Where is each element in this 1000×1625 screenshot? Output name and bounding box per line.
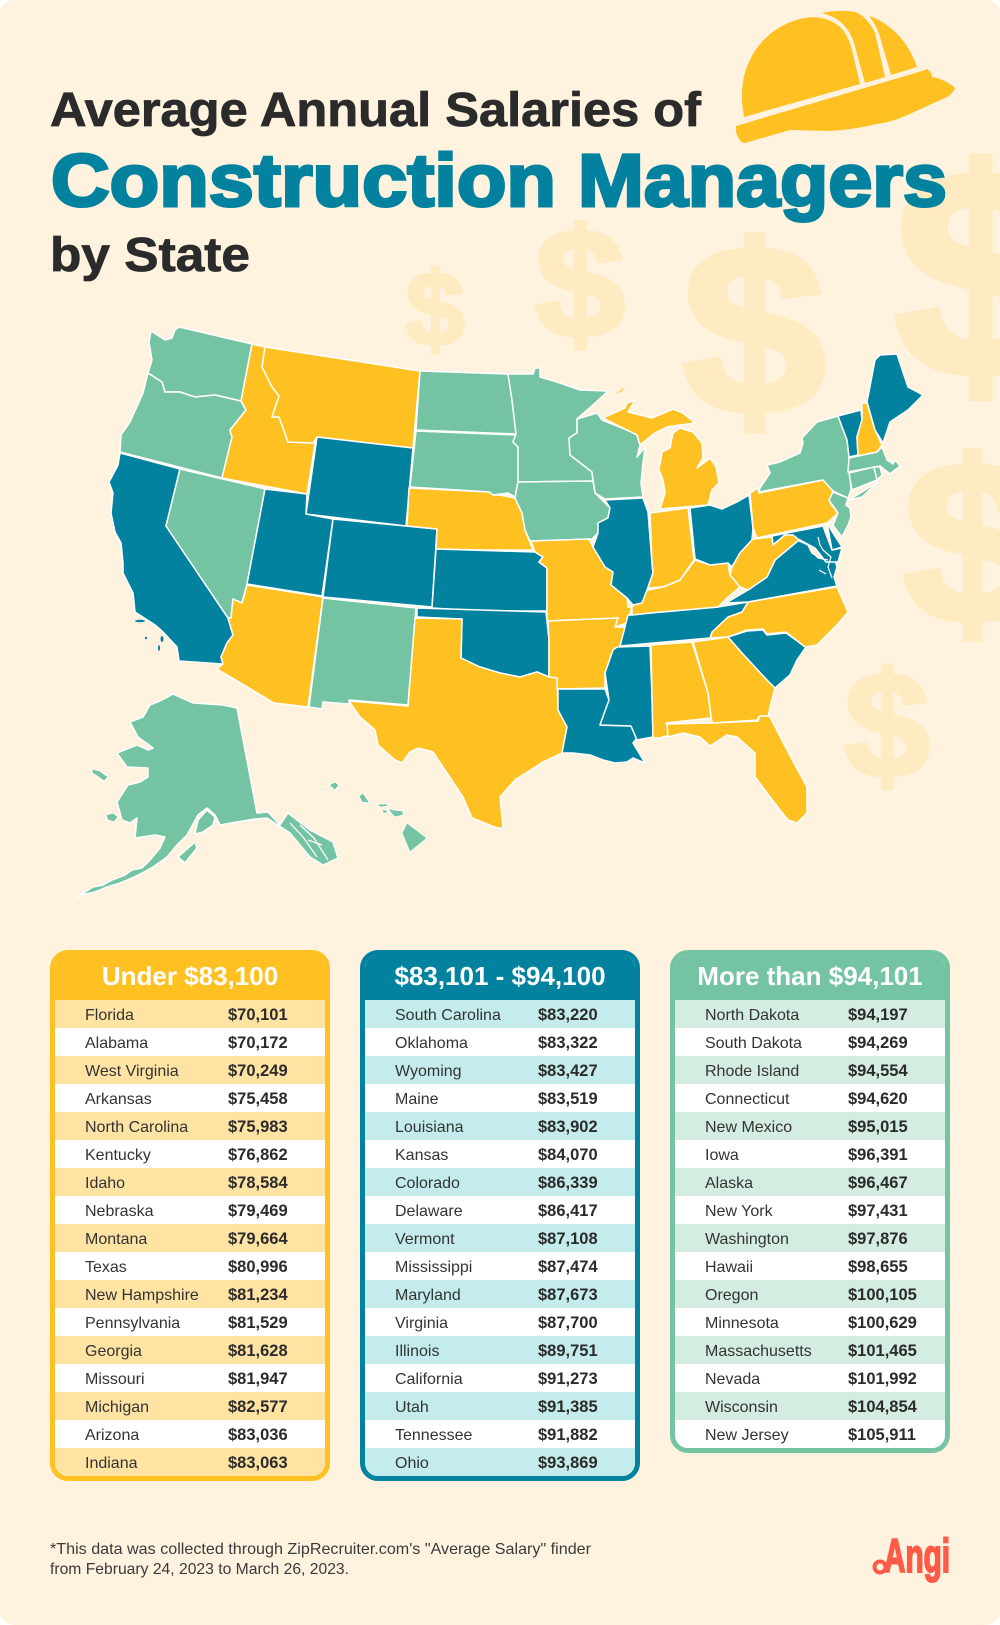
- state salary rows: $105,911: [848, 1426, 916, 1444]
- state salary rows: Ohio: [395, 1455, 429, 1472]
- panel: Under $83,100: [50, 950, 330, 1481]
- state salary rows: $97,876: [848, 1230, 908, 1248]
- panel heading: Under $83,100: [102, 961, 278, 991]
- state: Washington: [148, 327, 252, 401]
- state salary rows: New York: [705, 1203, 773, 1220]
- state: Idaho: [222, 344, 316, 494]
- state salary rows: Nebraska: [85, 1203, 153, 1220]
- Angi logo: Angi: [884, 1529, 950, 1582]
- state salary rows: Alaska: [705, 1175, 753, 1192]
- state salary rows: $98,655: [848, 1258, 908, 1276]
- state: North Dakota: [416, 371, 516, 434]
- state: Texas: [349, 618, 567, 828]
- state salary rows: Massachusetts: [705, 1343, 812, 1360]
- state salary rows: West Virginia: [85, 1063, 179, 1080]
- state: Rhode Island: [874, 467, 882, 480]
- background dollar signs: $: [405, 251, 465, 368]
- state: Montana: [262, 347, 420, 448]
- state: Pennsylvania: [750, 480, 838, 538]
- state salary rows: $87,108: [538, 1230, 598, 1248]
- state salary rows: [365, 1000, 635, 1476]
- state salary rows: $83,322: [538, 1034, 598, 1052]
- state: Tennessee: [620, 602, 748, 646]
- state salary rows: $70,101: [228, 1006, 288, 1024]
- state salary rows: Washington: [705, 1231, 789, 1248]
- state salary rows: Pennsylvania: [85, 1315, 180, 1332]
- state: Wisconsin: [569, 413, 645, 499]
- state salary rows: North Dakota: [705, 1007, 799, 1024]
- state salary rows: $83,220: [538, 1006, 598, 1024]
- state salary rows: $104,854: [848, 1398, 917, 1416]
- background dollar signs: [405, 110, 1000, 810]
- panel: More than $94,101: [670, 950, 950, 1453]
- state salary rows: $96,467: [848, 1174, 908, 1192]
- state salary rows: Minnesota: [705, 1315, 779, 1332]
- state salary rows: Missouri: [85, 1371, 145, 1388]
- state salary rows: $87,474: [538, 1258, 598, 1276]
- state salary rows: South Dakota: [705, 1035, 802, 1052]
- state: Connecticut: [849, 467, 877, 490]
- background dollar signs: $: [844, 642, 930, 810]
- state salary rows: Rhode Island: [705, 1063, 799, 1080]
- state: California: [109, 453, 233, 664]
- state: Nebraska: [407, 488, 533, 550]
- state salary rows: [55, 1000, 325, 1476]
- state salary rows: Florida: [85, 1007, 134, 1024]
- state: West Virginia: [730, 535, 799, 590]
- state: Maine: [867, 354, 923, 443]
- state salary rows: South Carolina: [395, 1007, 501, 1024]
- state salary rows: $94,554: [848, 1062, 908, 1080]
- state salary rows: $81,234: [228, 1286, 288, 1304]
- state salary rows: Tennessee: [395, 1427, 472, 1444]
- panel heading: [365, 955, 635, 1000]
- state salary rows: $89,751: [538, 1342, 598, 1360]
- state salary rows: $100,629: [848, 1314, 917, 1332]
- state: Kansas: [432, 549, 547, 611]
- state: Iowa: [515, 481, 610, 541]
- panel heading: [675, 955, 945, 1000]
- state salary rows: $94,269: [848, 1034, 908, 1052]
- state salary rows: $97,431: [848, 1202, 908, 1220]
- state salary rows: $91,385: [538, 1398, 598, 1416]
- state: Oregon: [120, 373, 246, 478]
- state: Ohio: [690, 495, 753, 567]
- state: New Hampshire: [857, 403, 882, 456]
- state: Delaware: [827, 523, 842, 550]
- state salary rows: $76,862: [228, 1146, 288, 1164]
- state salary rows: North Carolina: [85, 1119, 188, 1136]
- state salary rows: Delaware: [395, 1203, 463, 1220]
- title line 3: by State: [50, 229, 250, 282]
- title line 1: Average Annual Salaries of: [50, 84, 702, 137]
- title line 2: Managers: [578, 139, 947, 222]
- state salary rows: Montana: [85, 1231, 147, 1248]
- state: Illinois: [593, 498, 653, 605]
- state salary rows: $81,947: [228, 1370, 288, 1388]
- state: Colorado: [323, 519, 437, 607]
- state salary rows: $83,427: [538, 1062, 598, 1080]
- state salary rows: $70,249: [228, 1062, 288, 1080]
- state salary rows: Arkansas: [85, 1091, 152, 1108]
- title: [50, 84, 947, 282]
- state salary rows: $78,584: [228, 1174, 288, 1192]
- state salary rows: $79,469: [228, 1202, 288, 1220]
- state: Oklahoma: [417, 608, 549, 677]
- state salary rows: Michigan: [85, 1399, 149, 1416]
- state salary rows: New Jersey: [705, 1427, 789, 1444]
- state salary rows: Illinois: [395, 1343, 439, 1360]
- panel heading: [55, 955, 325, 1000]
- state: Hawaii: [321, 782, 427, 852]
- state salary rows: $84,070: [538, 1146, 598, 1164]
- state: Arizona: [217, 585, 323, 707]
- state: Wyoming: [306, 437, 413, 526]
- state salary rows: California: [395, 1371, 463, 1388]
- state: Virginia: [726, 540, 837, 603]
- Alaska: Kodiak island: [178, 842, 197, 863]
- state salary rows: Louisiana: [395, 1119, 464, 1136]
- state salary rows: Colorado: [395, 1175, 460, 1192]
- state salary rows: $75,983: [228, 1118, 288, 1136]
- state salary rows: $81,529: [228, 1314, 288, 1332]
- title line 2: [51, 139, 947, 222]
- state salary rows: Texas: [85, 1259, 127, 1276]
- state salary rows: $83,902: [538, 1118, 598, 1136]
- icon: hard hat: [736, 11, 955, 143]
- state: New Mexico: [309, 598, 416, 709]
- state salary rows: $86,417: [538, 1202, 598, 1220]
- state: Alaska: [76, 694, 338, 897]
- state salary rows: $100,105: [848, 1286, 917, 1304]
- state salary rows: Oregon: [705, 1287, 758, 1304]
- state salary rows: $83,036: [228, 1426, 288, 1444]
- state: Michigan lower peninsula: [659, 428, 719, 509]
- map of the United States: [76, 327, 923, 897]
- state: Minnesota: [508, 368, 608, 482]
- state: Georgia: [693, 637, 775, 723]
- state: Indiana: [648, 508, 694, 588]
- state: Michigan upper peninsula: [603, 400, 695, 445]
- Alaska: St Lawrence island: [92, 769, 108, 781]
- state: North Carolina: [710, 587, 848, 647]
- state salary rows: $87,700: [538, 1314, 598, 1332]
- state salary rows: Vermont: [395, 1231, 455, 1248]
- footnote: from February 24, 2023 to March 26, 2023.: [50, 1561, 349, 1578]
- state: Nevada: [166, 469, 265, 618]
- state salary rows: Hawaii: [705, 1259, 753, 1276]
- state: Vermont: [838, 410, 862, 457]
- state salary rows: $70,172: [228, 1034, 288, 1052]
- state salary rows: Mississippi: [395, 1259, 472, 1276]
- panel: $83,101 - $94,100: [360, 950, 640, 1481]
- state salary rows: $86,339: [538, 1174, 598, 1192]
- Angi logo: [874, 1529, 950, 1582]
- state: Arkansas: [548, 618, 625, 689]
- Alaska: Nunivak island: [106, 813, 118, 822]
- state salary rows: Virginia: [395, 1315, 448, 1332]
- state salary rows: $83,063: [228, 1454, 288, 1472]
- state salary rows: $91,882: [538, 1426, 598, 1444]
- state salary rows: $94,620: [848, 1090, 908, 1108]
- state salary rows: $94,197: [848, 1006, 908, 1024]
- state salary rows: [675, 1000, 945, 1448]
- state: Utah: [247, 489, 333, 596]
- state: South Dakota: [410, 431, 518, 497]
- state salary rows: Kansas: [395, 1147, 448, 1164]
- state salary rows: Connecticut: [705, 1091, 790, 1108]
- footnote: *This data was collected through ZipRecruiter.com's "Average Salary" finder: [50, 1541, 592, 1558]
- state: South Carolina: [728, 630, 806, 688]
- state salary rows: $82,577: [228, 1398, 288, 1416]
- state salary rows: $93,869: [538, 1454, 598, 1472]
- Long Island: [849, 482, 878, 500]
- state: Alabama: [651, 642, 711, 738]
- state salary rows: $75,458: [228, 1090, 288, 1108]
- state salary rows: $81,628: [228, 1342, 288, 1360]
- state salary rows: $80,996: [228, 1258, 288, 1276]
- state salary rows: Georgia: [85, 1343, 142, 1360]
- state salary rows: New Mexico: [705, 1119, 792, 1136]
- state salary rows: $101,465: [848, 1342, 917, 1360]
- state salary rows: Indiana: [85, 1455, 138, 1472]
- state salary rows: Kentucky: [85, 1147, 151, 1164]
- state salary rows: $79,664: [228, 1230, 288, 1248]
- state: Maryland: [772, 526, 842, 562]
- state: Missouri: [531, 539, 632, 627]
- California channel islands: [135, 620, 164, 651]
- state: Mississippi: [600, 646, 653, 740]
- state salary rows: New Hampshire: [85, 1287, 199, 1304]
- state salary rows: $95,015: [848, 1118, 908, 1136]
- state salary rows: Nevada: [705, 1371, 760, 1388]
- Alaska panhandle channels: [290, 823, 328, 860]
- state salary rows: $87,673: [538, 1286, 598, 1304]
- state salary rows: $91,273: [538, 1370, 598, 1388]
- Isle Royale: [616, 387, 625, 394]
- panel heading: $83,101 - $94,100: [394, 961, 606, 991]
- background dollar signs: $: [682, 196, 826, 464]
- background dollar signs: $: [535, 197, 625, 370]
- state salary rows: Alabama: [85, 1035, 148, 1052]
- state salary rows: Wisconsin: [705, 1399, 778, 1416]
- state salary rows: Iowa: [705, 1147, 739, 1164]
- state salary rows: $83,519: [538, 1090, 598, 1108]
- state salary rows: $96,391: [848, 1146, 908, 1164]
- state: Florida: [667, 716, 807, 823]
- Alaska: Kenai peninsula: [195, 810, 215, 834]
- state salary rows: Maryland: [395, 1287, 461, 1304]
- panel heading: More than $94,101: [697, 961, 923, 991]
- state salary rows: Utah: [395, 1399, 429, 1416]
- state: Louisiana: [558, 689, 645, 763]
- title line 2: Construction: [51, 139, 556, 222]
- state salary rows: Arizona: [85, 1427, 139, 1444]
- state salary rows: Oklahoma: [395, 1035, 468, 1052]
- state: New Jersey: [829, 492, 851, 537]
- state salary rows: Wyoming: [395, 1063, 462, 1080]
- Chesapeake Bay lines: [810, 537, 832, 578]
- state: Kentucky: [632, 560, 740, 615]
- state: New York: [759, 416, 851, 498]
- state: Massachusetts: [848, 447, 900, 474]
- state salary rows: Maine: [395, 1091, 439, 1108]
- state salary rows: Idaho: [85, 1175, 125, 1192]
- state salary rows: $101,992: [848, 1370, 917, 1388]
- footnote: [50, 1541, 592, 1578]
